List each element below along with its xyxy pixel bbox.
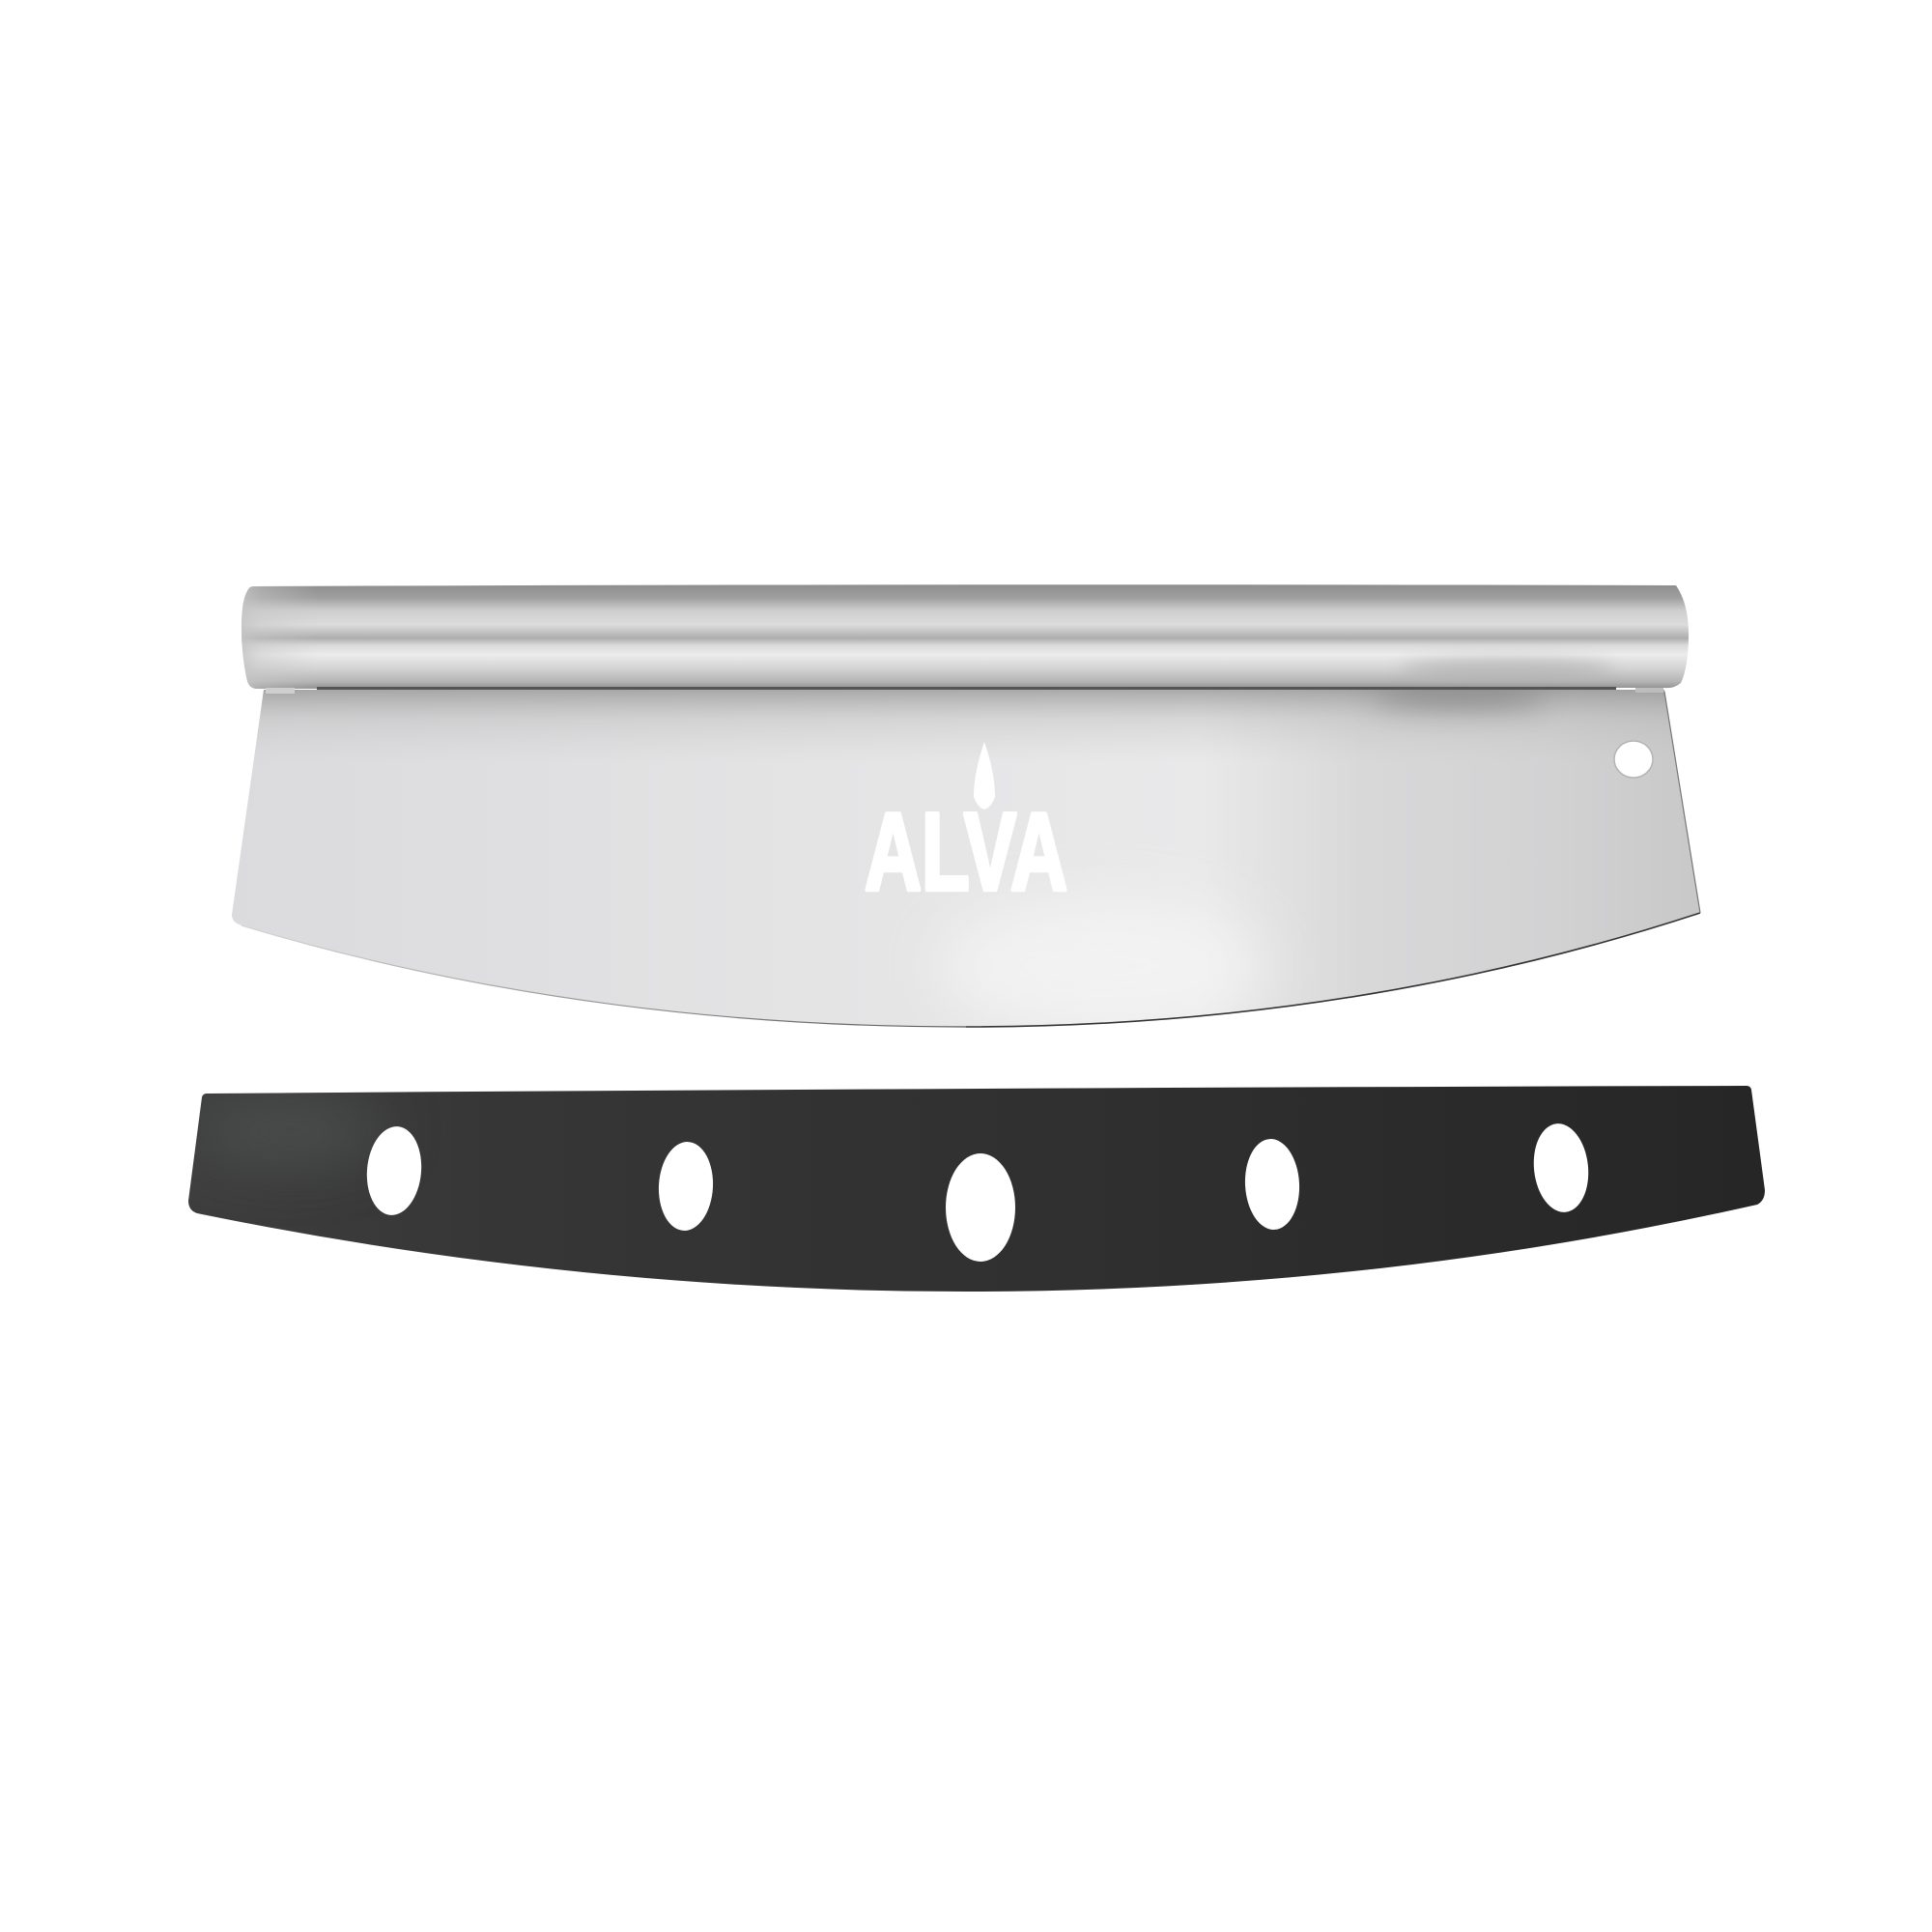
right clip tab — [1635, 688, 1663, 693]
knife — [222, 582, 1710, 1034]
hanging hole — [1614, 741, 1653, 778]
logo flame — [974, 742, 995, 810]
cover hole 3 — [946, 1153, 1015, 1262]
blade right edge — [1664, 692, 1700, 913]
handle rod — [240, 582, 1692, 694]
left clip tab — [266, 688, 295, 694]
cover hole 4 — [1243, 1138, 1301, 1231]
blade cover — [188, 1086, 1765, 1292]
logo: ALVA — [865, 742, 1067, 914]
blade — [222, 686, 1710, 1034]
cover hole 2 — [657, 1141, 715, 1232]
logo wordmark: ALVA — [865, 791, 1067, 914]
cover sheen — [220, 1095, 363, 1165]
product illustration: rocker knife and blade cover — [188, 584, 1765, 1292]
blade cutting edge — [242, 913, 1700, 1027]
cover hole 5 — [1529, 1121, 1593, 1215]
cover hole 1 — [363, 1124, 425, 1217]
rod underside shadow line — [317, 687, 1616, 690]
